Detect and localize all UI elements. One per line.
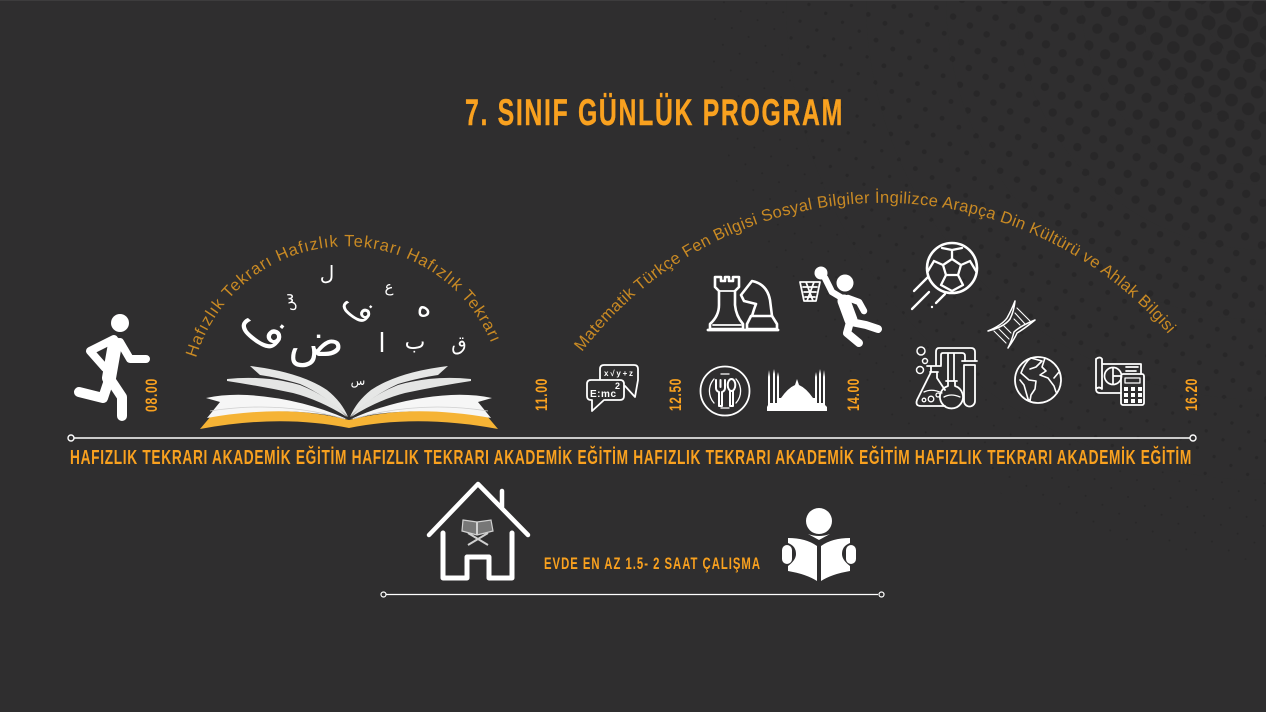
- icon: chat bubbles with formula: x√y+z: [604, 369, 633, 378]
- spine: [342, 420, 356, 428]
- arabic letters: ب: [405, 330, 425, 355]
- curved text: Hafızlık Tekrarı: Hafızlık Tekrarı Hafızlık Tekrarı Hafızlık Tekrarı: [186, 234, 499, 357]
- time label 11.00: 11.00: [532, 378, 551, 411]
- icon: runner: [79, 314, 146, 416]
- title: 7. SINIF GÜNLÜK PROGRAM: [465, 92, 844, 133]
- icon: open book: [200, 366, 498, 429]
- icon: mosque: [767, 369, 827, 411]
- time label 08.00: 08.00: [142, 378, 161, 412]
- main timeline: [68, 435, 1196, 441]
- arabic letters: ق: [451, 331, 467, 355]
- time label 14.00: 14.00: [844, 378, 863, 411]
- arabic letters: ف: [334, 282, 384, 333]
- icon: basketball player: [800, 266, 878, 343]
- arabic letters: ه: [417, 290, 431, 323]
- arabic letters: ض: [288, 313, 344, 368]
- icon: chart and calculator: [1096, 358, 1144, 405]
- time label 12.50: 12.50: [666, 378, 685, 411]
- icon: chat bubbles with formula: 2: [615, 381, 620, 391]
- curved text: subjects: Matematik Türkçe Fen Bilgisi Sosyal Bilgiler İngilizce Arapça Din Kültürü ve Ahlak Bilgisi: [574, 188, 1177, 351]
- arabic letters: ف: [230, 292, 301, 364]
- icon: person reading: [782, 508, 856, 581]
- hoop: [800, 282, 820, 301]
- arabic letters: س: [279, 293, 297, 311]
- arabic letters: س: [351, 374, 365, 389]
- left half: [200, 366, 349, 429]
- icon: chess pieces: [708, 277, 778, 330]
- arabic letters: ل: [320, 261, 334, 285]
- icon: chat bubbles with formula: E:mc: [590, 389, 616, 400]
- Quran on stand: [462, 520, 493, 545]
- right half: [349, 366, 498, 429]
- study caption: EVDE EN AZ 1.5- 2 SAAT ÇALIŞMA: [544, 554, 761, 573]
- icon: plate and cutlery: [700, 366, 750, 416]
- icon: soccer ball: [912, 243, 977, 309]
- arabic letters: [230, 261, 467, 389]
- study timeline: [381, 592, 884, 597]
- icon: chemistry flasks: [916, 347, 977, 408]
- icon: globe: [1015, 357, 1061, 403]
- icon: DNA helix: [988, 301, 1035, 348]
- arabic letters: ا: [378, 329, 386, 359]
- time label 16.20: 16.20: [1182, 378, 1201, 411]
- icon: chat bubbles with formula: [587, 365, 638, 411]
- arabic letters: ع: [385, 278, 394, 296]
- icon: house with Quran: [429, 484, 528, 578]
